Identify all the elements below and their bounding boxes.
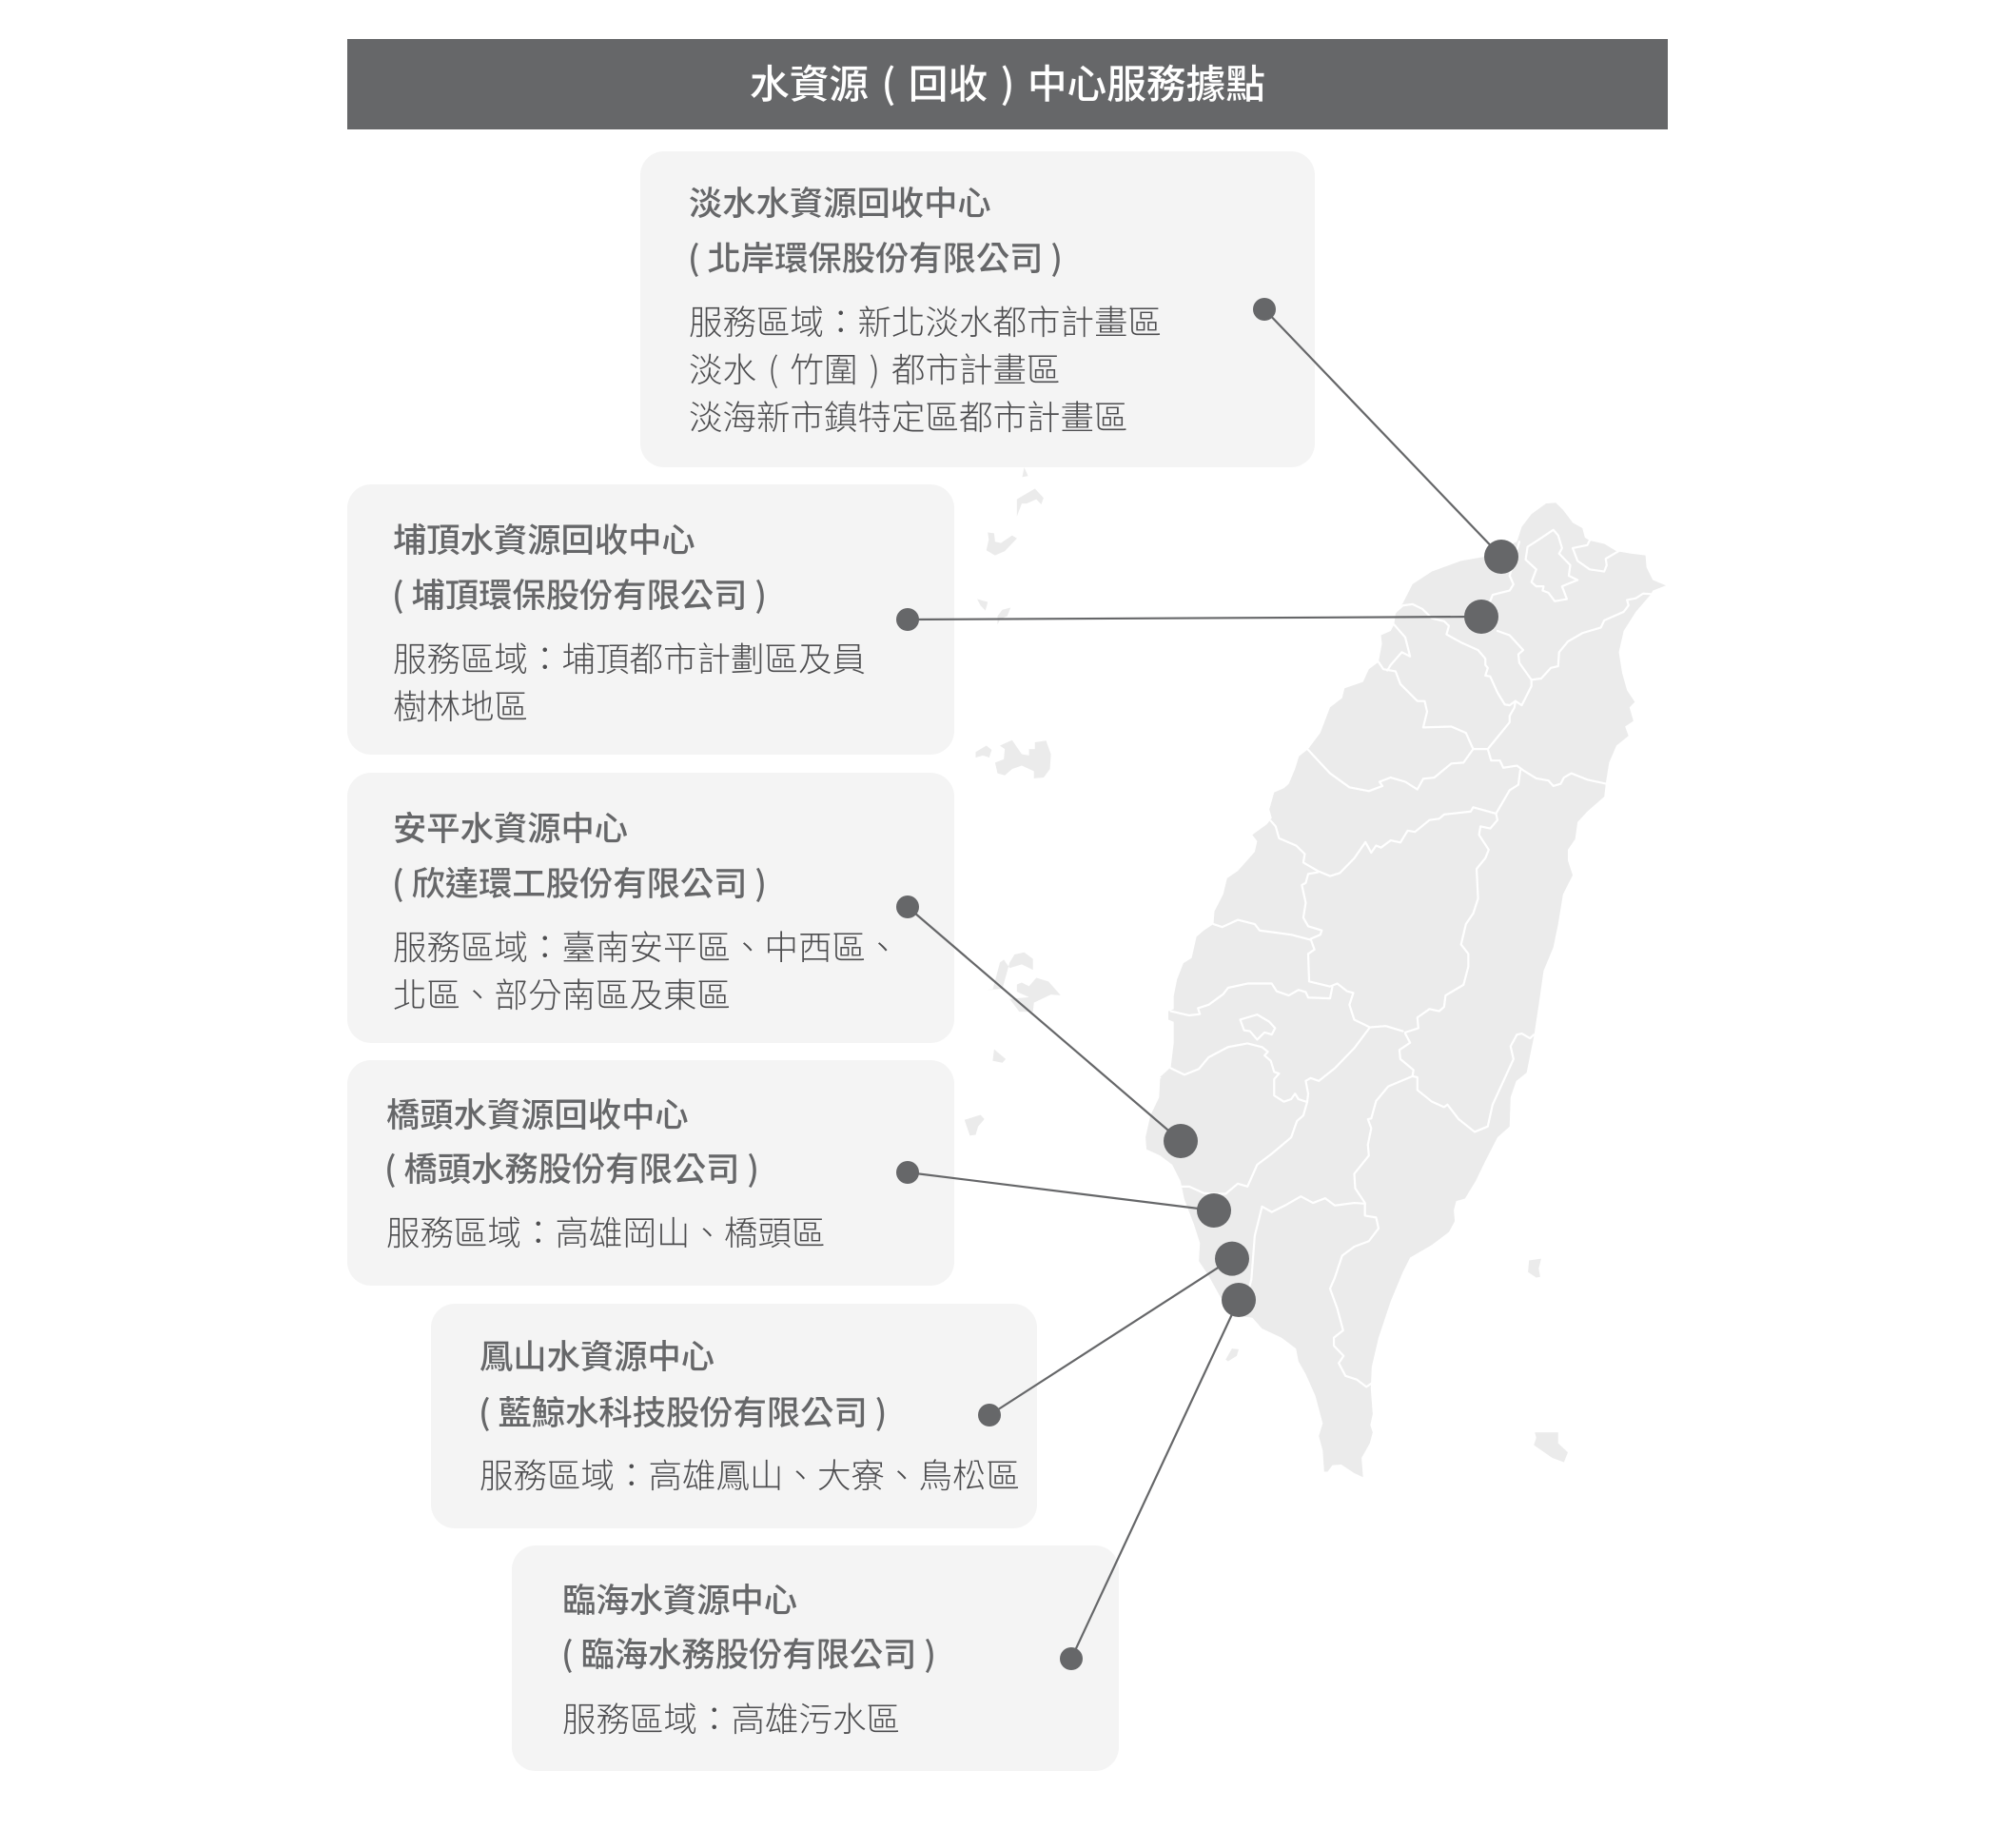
heading: 淡水: 淡水水資源回收中心: [689, 177, 991, 226]
service area: 臨海: 服務區域：高雄污水區: [562, 1693, 900, 1741]
service area: 埔頂: 服務區域：埔頂都市計劃區及員: [393, 633, 866, 681]
panel: 埔頂水資源回收中心: [347, 484, 954, 755]
service area: 埔頂: 樹林地區: [393, 680, 528, 729]
title bar: [347, 39, 1668, 129]
title bar: (: [882, 53, 895, 110]
service area: 橋頭: 服務區域：高雄岡山、橋頭區: [386, 1207, 826, 1255]
operator: 欣達環工: ( 欣達環工股份有限公司 ): [392, 857, 767, 906]
service area: 安平: 北區、部分南區及東區: [393, 969, 731, 1017]
service area: 安平: 服務區域：臺南安平區、中西區、: [393, 921, 900, 970]
connector: 鳳山: [978, 1242, 1249, 1427]
heading: 橋頭: 橋頭水資源回收中心: [386, 1089, 689, 1137]
connector: 安平: [896, 895, 1198, 1158]
operator: 埔頂環保: ( 埔頂環保股份有限公司 ): [392, 569, 767, 618]
panel: 臨海水資源中心: [512, 1545, 1119, 1771]
panel: 鳳山水資源中心: [431, 1304, 1037, 1528]
heading: 埔頂: 埔頂水資源回收中心: [393, 514, 695, 562]
title bar: ): [1001, 53, 1014, 110]
heading: 鳳山: 鳳山水資源中心: [480, 1330, 714, 1379]
panel: 橋頭水資源回收中心: [347, 1060, 954, 1286]
service area: 埔頂: [393, 633, 866, 729]
connector: 埔頂: [896, 600, 1498, 634]
service area: 淡水: ): [870, 344, 880, 392]
title bar: 水資源 回收 中心服務據點: [750, 53, 1265, 110]
operator: 臨海水務: ( 臨海水務股份有限公司 ): [561, 1628, 936, 1677]
connector: 淡水: [1253, 298, 1518, 574]
service area: 淡水: (: [768, 344, 778, 392]
heading: 安平: 安平水資源中心: [393, 802, 628, 851]
service area: 淡水: 淡水 竹圍 都市計畫區: [689, 344, 1061, 392]
operator: 藍鯨水科技: ( 藍鯨水科技股份有限公司 ): [479, 1387, 887, 1435]
connector: 臨海: [1060, 1283, 1256, 1670]
panel: 淡水水資源回收中心: [640, 151, 1315, 467]
service area: 淡水: 服務區域：新北淡水都市計畫區: [689, 296, 1162, 344]
service area: 安平: [393, 921, 900, 1017]
service area: 鳳山: 服務區域：高雄鳳山、大寮、鳥松區: [480, 1449, 1020, 1498]
operator: 橋頭水務: ( 橋頭水務股份有限公司 ): [384, 1143, 759, 1191]
service area: 淡水: [689, 296, 1162, 440]
connector: 橋頭: [896, 1161, 1231, 1228]
panel: 安平水資源中心: [347, 773, 954, 1043]
operator: 北岸環保: ( 北岸環保股份有限公司 ): [688, 232, 1063, 281]
heading: 臨海: 臨海水資源中心: [562, 1574, 797, 1623]
service area: 淡水: 淡海新市鎮特定區都市計畫區: [689, 391, 1128, 440]
